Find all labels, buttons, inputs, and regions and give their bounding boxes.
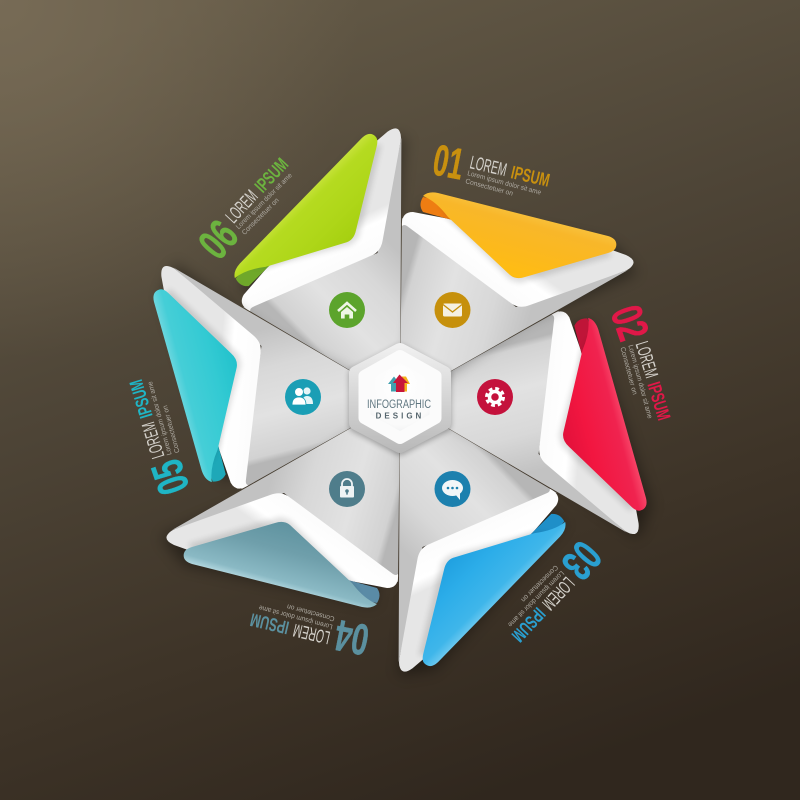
label 03: 03 [552,532,611,589]
label 02: LOREM [632,339,662,380]
label 01: 01 [429,136,468,190]
label 06: Consectetuer on [241,197,281,237]
logo: three house arrows [388,374,410,392]
label 05: 05 [142,453,199,501]
label 04 [248,602,373,664]
label 02: Consectetuer on [618,346,638,396]
label 03: Consectetuer on [519,563,559,603]
label 05: IPSUM [125,377,157,421]
panel: 01 yellow [400,136,637,405]
center hexagon: DESIGN [376,412,424,420]
panel: 02 red [400,268,748,607]
icon: gear [477,379,513,415]
center hexagon: INFOGRAPHIC [367,399,431,411]
panel: 04 slate [161,400,400,664]
label 06 [185,136,301,275]
label 04: LOREM [291,620,332,649]
label 04: IPSUM [248,609,291,639]
icon: users [285,379,321,415]
icon: lock [329,471,365,507]
center hexagon [356,350,444,448]
label 01: Lorem ipsum dolor sit ame [466,170,542,197]
label 01: Consectetuer on [464,178,514,198]
icon: home [329,292,365,328]
label 04: Consectetuer on [286,602,336,622]
label 01: LOREM [468,151,509,180]
label 05: Consectetuer on [162,404,182,454]
label 06: 06 [189,211,248,268]
label 06: IPSUM [250,154,292,196]
panel: 06 green [169,66,521,406]
label 02: Lorem ipsum dolor sit ame [626,344,653,420]
label 02: 02 [601,299,658,347]
panel: 03 blue [280,400,629,739]
label 06: LOREM [221,186,262,227]
label 03 [499,525,615,664]
label 04: 04 [331,610,373,664]
icon: mail [434,292,470,328]
label 02 [589,291,705,430]
label 04: Lorem ipsum dolor sit ame [258,603,334,630]
panel: 05 cyan [54,195,406,536]
label 05 [95,370,211,509]
label 01 [429,136,552,198]
label 06: Lorem ipsum dolor sit ame [235,172,294,231]
label 05: LOREM [138,420,168,461]
label 03: Lorem ipsum dolor sit ame [506,569,565,628]
icon: chat [434,471,470,507]
label 03: IPSUM [508,604,550,646]
label 03: LOREM [538,573,579,614]
label 02: IPSUM [643,379,675,423]
label 01: IPSUM [509,161,552,191]
label 05: Lorem ipsum dolor sit ame [147,380,174,456]
